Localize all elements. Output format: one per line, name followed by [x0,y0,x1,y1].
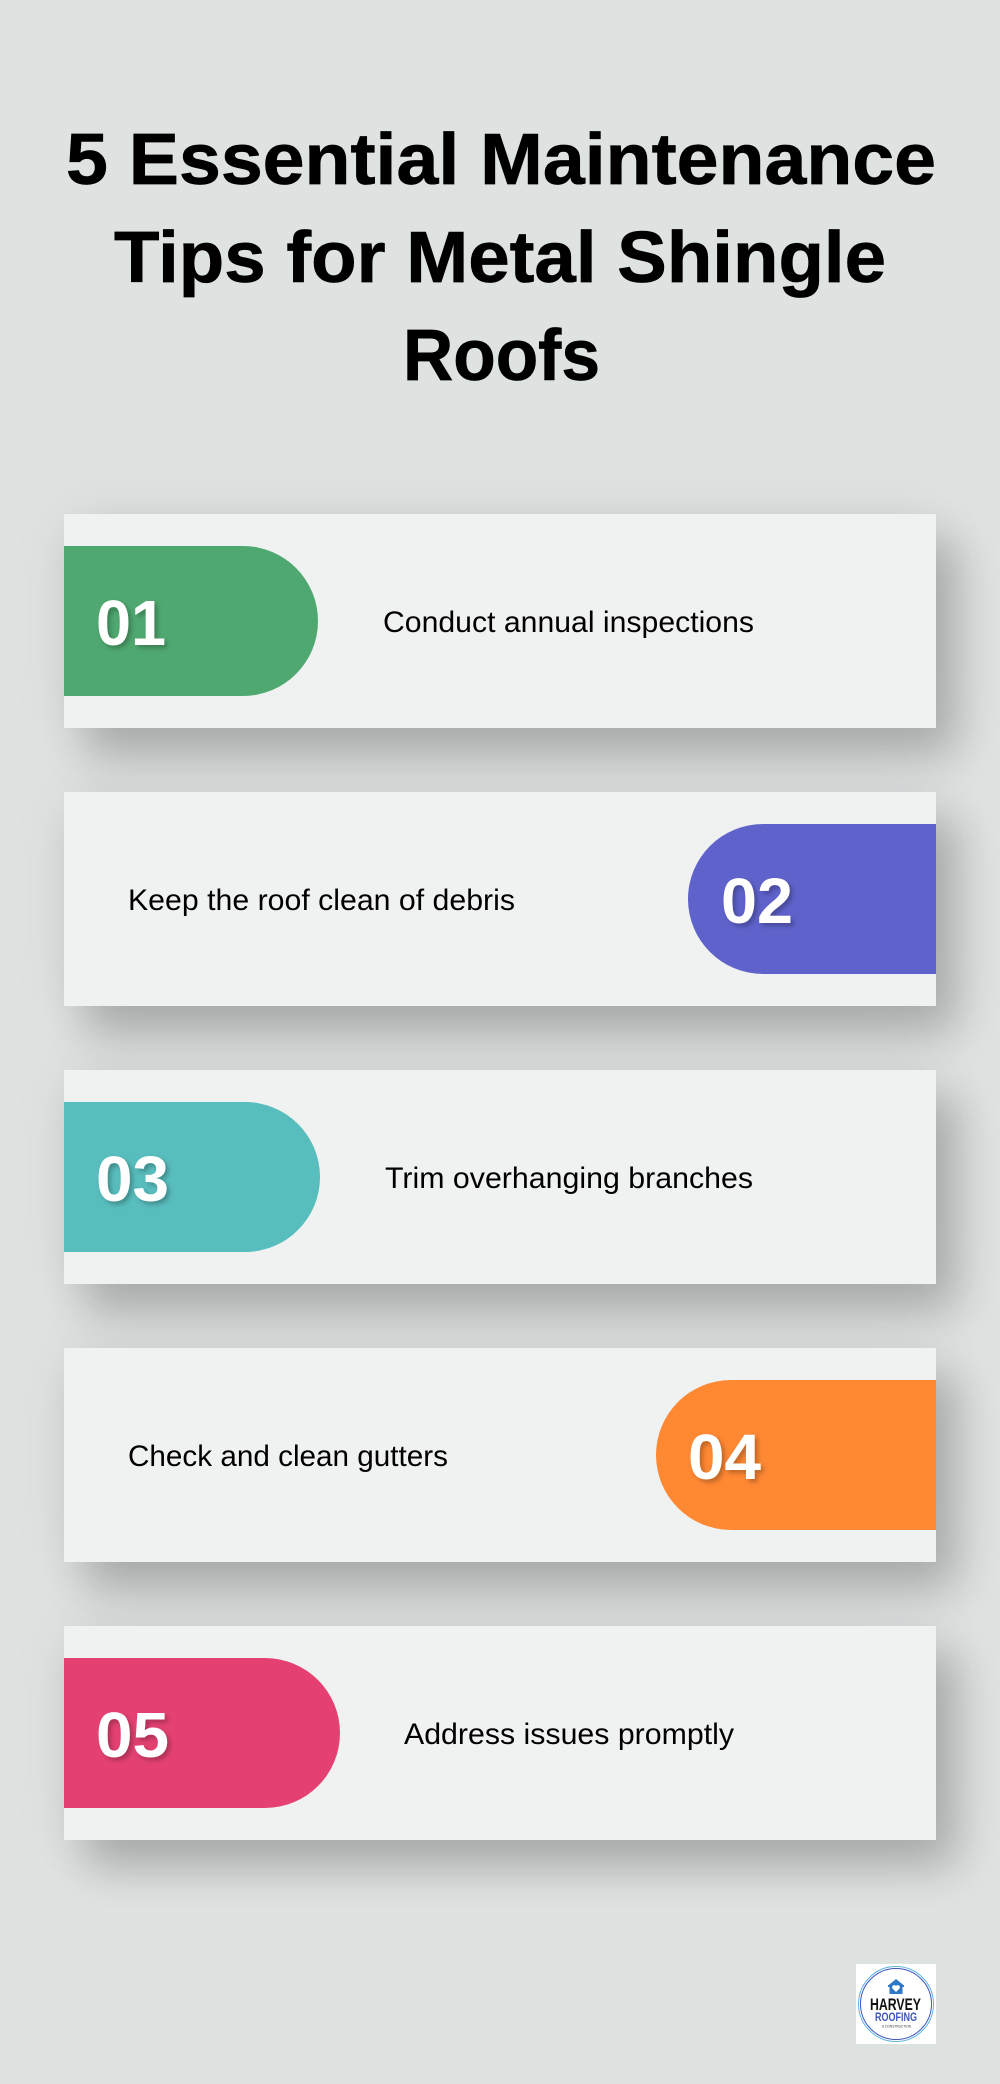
logo: Harvey Roofing [856,1964,936,2044]
number badge 04 [656,1380,936,1530]
logo: Harvey Roofing: HARVEY [870,1995,921,2014]
card shadows [64,514,958,1868]
number badge 05 [64,1658,340,1808]
title: Roofs [403,316,600,396]
panel: tip 01 [64,514,936,728]
number badge 03: 03 [96,1143,169,1215]
tip text 01: Conduct annual inspections [383,606,754,639]
tip text 05: Address issues promptly [404,1718,734,1751]
logo: Harvey Roofing: ROOFING [875,2010,917,2024]
number badge 01 [64,546,318,696]
panel: tip 05 [64,1626,936,1840]
number badge 03 [64,1102,320,1252]
number badge 05: 05 [96,1699,169,1771]
title: 5 Essential Maintenance [66,120,936,200]
number badge 02: 02 [721,865,793,937]
panel: tip 02 [64,792,936,1006]
number badge 01: 01 [96,587,166,659]
number badge 02 [688,824,936,974]
panel: tip 04 [64,1348,936,1562]
number badge 04: 04 [688,1421,761,1493]
title: Tips for Metal Shingle [114,218,886,298]
logo: Harvey Roofing: & CONSTRUCTION [882,2024,911,2028]
icon: house with heart [888,1979,904,1994]
title [66,120,936,396]
tip text 03: Trim overhanging branches [385,1162,753,1195]
panel: tip 03 [64,1070,936,1284]
tip text 02: Keep the roof clean of debris [128,884,515,917]
tip text 04: Check and clean gutters [128,1440,448,1473]
